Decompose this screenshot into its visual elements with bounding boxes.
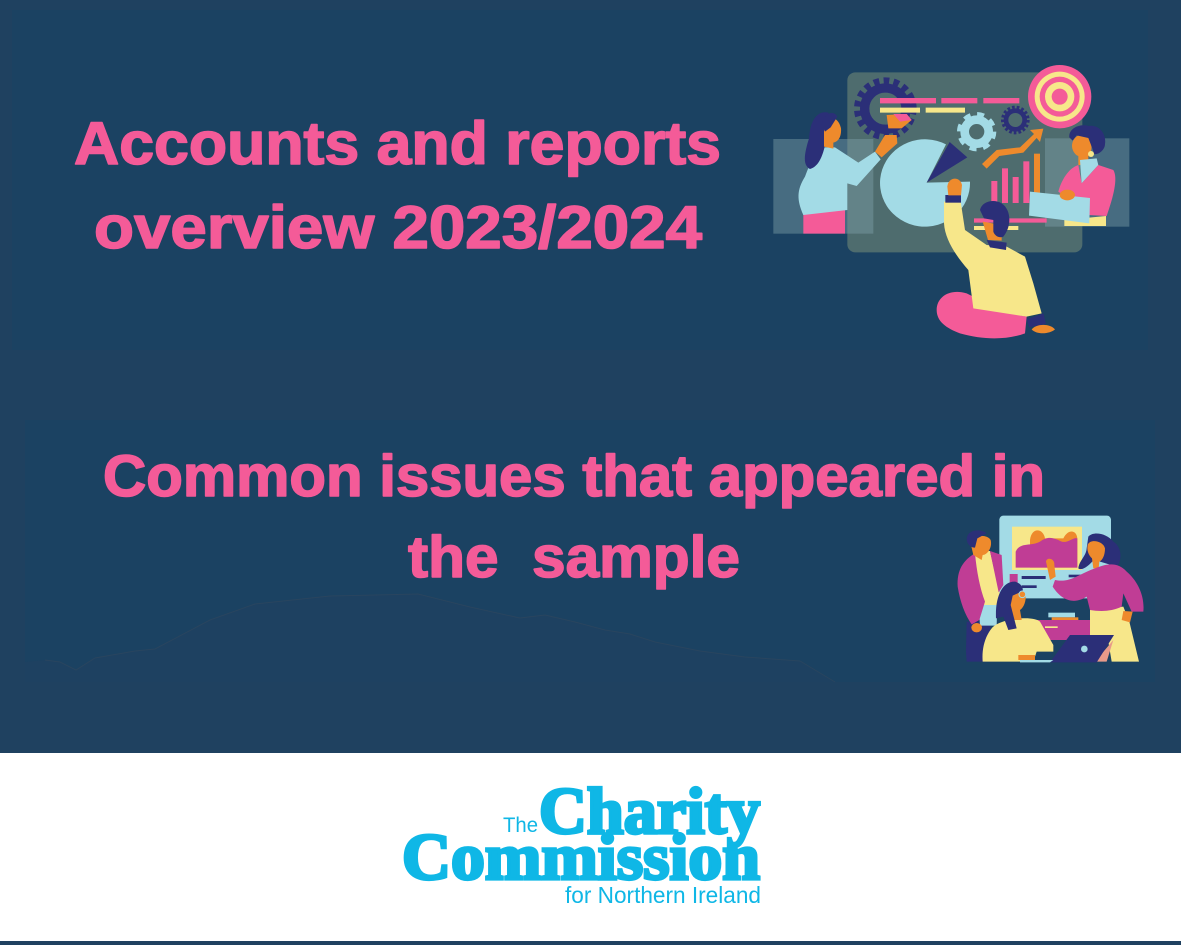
logo: The Charity Commission for Northern Ireland: Commission	[402, 821, 760, 894]
icon: laptop	[1020, 635, 1114, 662]
figure: woman left	[799, 112, 912, 234]
subtitle: common issues: Common issues that appeared in	[103, 444, 1045, 509]
figure: seated person centre	[937, 179, 1055, 338]
trend arrow	[982, 129, 1043, 169]
bar chart	[991, 154, 1040, 203]
figure: woman standing right	[1046, 534, 1144, 662]
figure: person right	[1029, 125, 1115, 226]
header bars	[880, 98, 1019, 113]
logo: The Charity Commission for Northern Ireland: Charity	[539, 775, 760, 848]
lower bars	[974, 218, 1047, 230]
illustration: team reviewing presentation	[958, 516, 1144, 662]
title: Accounts and reports	[74, 110, 721, 177]
pie chart	[880, 139, 970, 227]
bottom strip	[0, 941, 1181, 945]
icon: large gear	[857, 81, 913, 137]
logo: The Charity Commission for Northern Ireland: for Northern Ireland	[565, 882, 761, 908]
footer band	[0, 753, 1181, 941]
faint hill silhouette	[25, 594, 835, 682]
figure: woman at laptop	[982, 582, 1053, 662]
dashboard panel	[847, 72, 1082, 252]
illustration: team analysing charts	[773, 65, 1129, 338]
title: overview 2023/2024	[94, 194, 703, 261]
presentation screen	[999, 516, 1111, 598]
subtitle: common issues: the sample	[408, 525, 740, 590]
title	[74, 110, 721, 261]
icon: small gear	[1003, 107, 1028, 133]
icon: target	[1028, 65, 1091, 128]
logo: The Charity Commission for Northern Ireland	[402, 775, 761, 908]
subtitle: common issues	[103, 444, 1045, 590]
figure: man left	[958, 530, 1003, 662]
icon: light gear	[959, 114, 994, 149]
desk and folders	[1035, 613, 1090, 640]
translucent side panels	[773, 138, 1129, 234]
logo: The Charity Commission for Northern Ireland: The	[503, 814, 538, 837]
